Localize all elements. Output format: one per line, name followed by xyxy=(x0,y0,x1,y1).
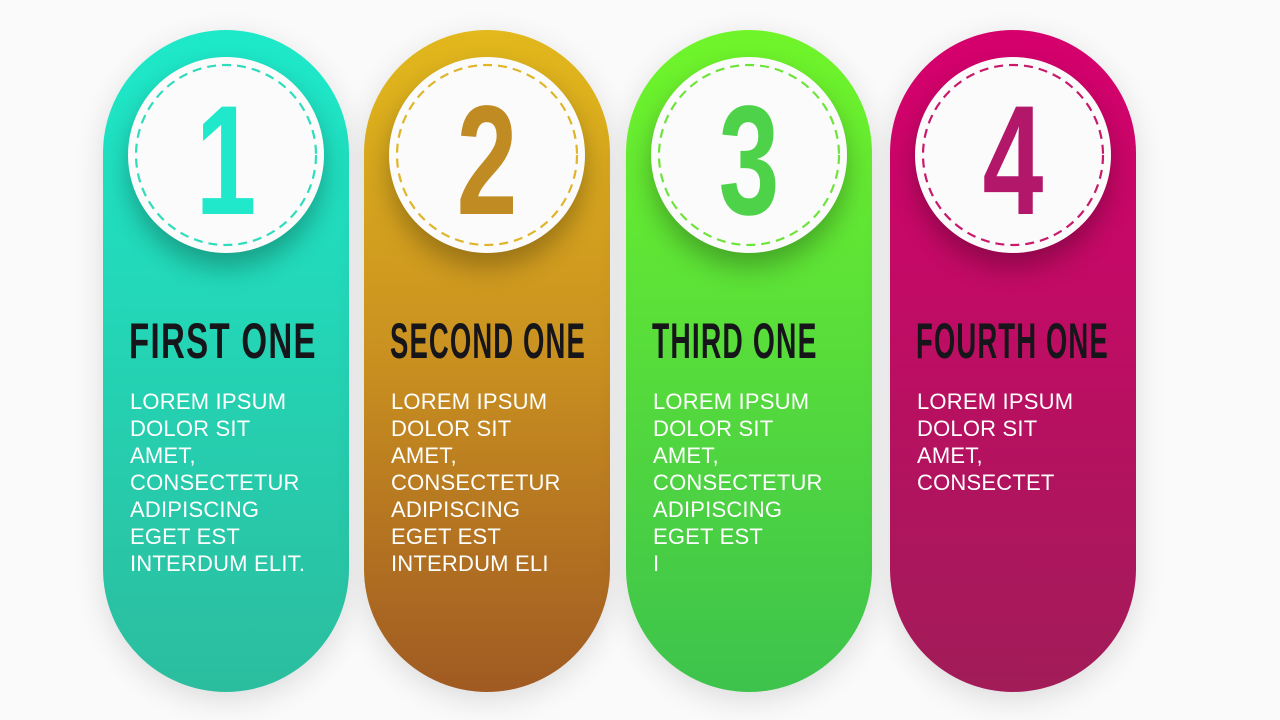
text: first: DOLOR SIT xyxy=(130,416,250,441)
text: second xyxy=(391,389,561,576)
text: second: INTERDUM ELI xyxy=(391,551,549,576)
panel: first xyxy=(103,30,349,692)
heading: fourth one: FOURTH ONE xyxy=(916,313,1109,369)
text: third: CONSECTETUR xyxy=(653,470,823,495)
panel: second xyxy=(364,30,610,692)
text: fourth: LOREM IPSUM xyxy=(917,389,1073,414)
panel: fourth xyxy=(890,30,1136,692)
heading: second one: SECOND ONE xyxy=(390,313,586,369)
text: second: ADIPISCING xyxy=(391,497,520,522)
text: fourth xyxy=(917,389,1073,495)
icon: number 4 circle: 4 xyxy=(983,74,1043,248)
icon: number 3 circle xyxy=(651,57,847,253)
text: third: ADIPISCING xyxy=(653,497,782,522)
text: first: ADIPISCING xyxy=(130,497,259,522)
text: fourth: AMET, xyxy=(917,443,983,468)
text: second: EGET EST xyxy=(391,524,501,549)
text: fourth: CONSECTET xyxy=(917,470,1054,495)
text: third: AMET, xyxy=(653,443,719,468)
text: second: DOLOR SIT xyxy=(391,416,511,441)
text: third: LOREM IPSUM xyxy=(653,389,809,414)
text: first: INTERDUM ELIT. xyxy=(130,551,305,576)
panel: third xyxy=(626,30,872,692)
heading: third one: THIRD ONE xyxy=(652,313,818,369)
icon: number 2 circle xyxy=(389,57,585,253)
heading: first one: FIRST ONE xyxy=(129,313,317,369)
text: third: EGET EST xyxy=(653,524,763,549)
icon: number 4 circle xyxy=(915,57,1111,253)
text: third: I xyxy=(653,551,659,576)
text: second: CONSECTETUR xyxy=(391,470,561,495)
icon: number 3 circle: 3 xyxy=(719,74,779,248)
text: third: DOLOR SIT xyxy=(653,416,773,441)
text: fourth: DOLOR SIT xyxy=(917,416,1037,441)
text: first xyxy=(130,389,305,576)
text: second: LOREM IPSUM xyxy=(391,389,547,414)
text: second: AMET, xyxy=(391,443,457,468)
text: third xyxy=(653,389,823,576)
text: first: LOREM IPSUM xyxy=(130,389,286,414)
icon: number 1 circle: 1 xyxy=(196,74,256,248)
text: first: AMET, xyxy=(130,443,196,468)
icon: number 2 circle: 2 xyxy=(457,74,517,248)
text: first: CONSECTETUR xyxy=(130,470,300,495)
text: first: EGET EST xyxy=(130,524,240,549)
icon: number 1 circle xyxy=(128,57,324,253)
